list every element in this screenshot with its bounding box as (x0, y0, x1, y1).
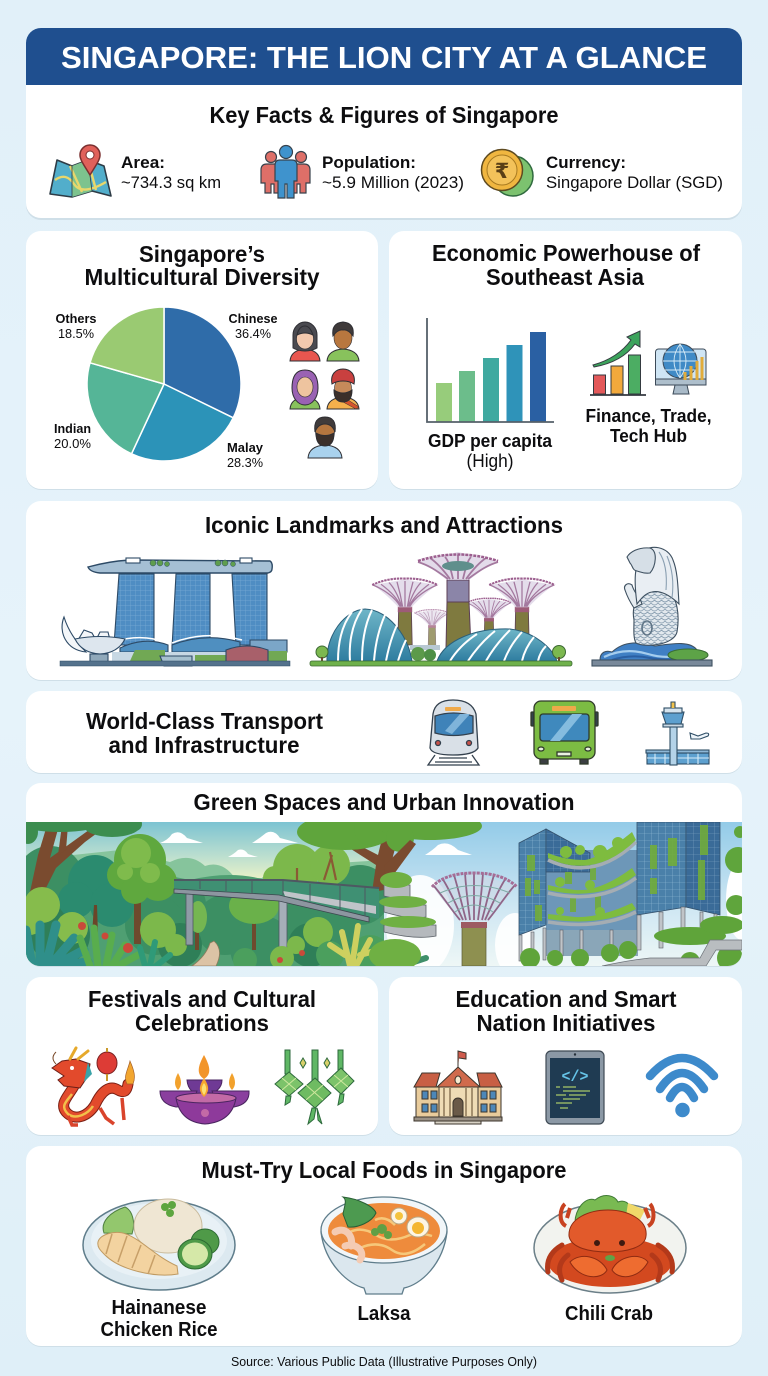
text: area: Area: (121, 153, 165, 172)
label: chicken rice: Hainanese (112, 1297, 206, 1319)
text: population (322, 153, 464, 192)
heading: local foods: Must-Try Local Foods in Singapore (202, 1157, 566, 1183)
heading: education: Education and Smart (456, 986, 677, 1012)
icon: coins (482, 150, 533, 196)
heading: transport (86, 708, 323, 758)
label: chicken rice (100, 1297, 218, 1341)
terraces (384, 885, 436, 937)
tall tree left (30, 831, 95, 892)
heading: key facts: Key Facts & Figures of Singapore (210, 102, 558, 128)
panel: transport (26, 691, 742, 774)
canopy walkway (174, 879, 379, 948)
panel: education (389, 977, 742, 1136)
illustration: Marina Bay Sands (60, 558, 290, 666)
label: finance, trade, tech hub (586, 405, 712, 446)
text: currency: Singapore Dollar (SGD) (546, 173, 723, 192)
text: area: ~734.3 sq km (121, 173, 221, 192)
illustration: chicken rice (83, 1199, 235, 1290)
heading: transport: and Infrastructure (108, 732, 300, 758)
heading: green spaces: Green Spaces and Urban Innovation (194, 789, 574, 815)
panel: economic powerhouse (389, 231, 742, 490)
icon: monitor and globe (656, 344, 706, 394)
green building (519, 822, 720, 935)
panel: key facts (26, 28, 742, 220)
heading: festivals: Festivals and Cultural (88, 986, 316, 1012)
illustration: forest and vertical gardens (26, 822, 742, 966)
distant hills (26, 850, 384, 966)
icon: wifi (650, 1058, 714, 1113)
text: area (121, 153, 221, 192)
icon: train (428, 700, 479, 765)
source note: Source: Various Public Data (Illustrative Purposes Only) (231, 1355, 537, 1369)
mid foreground tree (140, 912, 187, 956)
panel: multicultural diversity (26, 231, 378, 490)
icon: tablet with code: </> (562, 1068, 588, 1086)
icon: bus (531, 701, 598, 764)
icon: growth bars with arrow (590, 331, 646, 395)
panel: local foods (26, 1146, 742, 1347)
heading: multicultural diversity: Multicultural Diversity (84, 264, 320, 290)
label: GDP per capita (428, 430, 553, 471)
pie labels: 20.0% (54, 437, 91, 451)
background trees (26, 846, 388, 966)
heading: transport: World-Class Transport (86, 708, 323, 734)
heading: economic powerhouse: Southeast Asia (486, 264, 644, 290)
ground plants (520, 916, 742, 966)
icon: coins: ₹ (495, 159, 509, 183)
label: GDP per capita: GDP per capita (428, 430, 553, 451)
bar chart: GDP per capita (427, 318, 554, 422)
heading: economic powerhouse: Economic Powerhouse of (432, 240, 700, 266)
label: GDP per capita: (High) (466, 450, 514, 471)
pie labels (54, 312, 278, 470)
supertree (432, 872, 517, 966)
heading: multicultural diversity (84, 241, 320, 290)
light tree (134, 898, 141, 944)
heading: iconic landmarks: Iconic Landmarks and Attractions (205, 512, 563, 538)
icon: tablet with code (546, 1051, 604, 1124)
panel: festivals (26, 977, 378, 1136)
text: currency: Currency: (546, 153, 626, 172)
illustration: laksa (321, 1197, 447, 1294)
label: finance, trade, tech hub: Tech Hub (610, 425, 687, 446)
heading: economic powerhouse (432, 240, 700, 290)
heading: multicultural diversity: Singapore’s (139, 241, 265, 267)
icon: diverse people (290, 322, 359, 458)
foreground plants (270, 917, 333, 970)
teal tree (58, 855, 134, 927)
icon: airport tower (646, 702, 709, 765)
text: population: Population: (322, 153, 416, 172)
icon: diyas (160, 1055, 249, 1124)
label: laksa: Laksa (358, 1303, 411, 1325)
pie labels: Others (56, 312, 97, 326)
label: finance, trade, tech hub: Finance, Trade, (586, 405, 712, 426)
text: population: ~5.9 Million (2023) (322, 173, 464, 192)
left bush (26, 887, 88, 944)
label: chili crab: Chili Crab (565, 1303, 653, 1325)
heading: education: Nation Initiatives (476, 1010, 656, 1036)
columns (546, 930, 638, 956)
pie labels: Indian (54, 422, 91, 436)
heading: festivals: Celebrations (135, 1010, 269, 1036)
illustration: chili crab (534, 1196, 686, 1293)
pie labels: Malay (227, 441, 263, 455)
panel: green spaces (16, 783, 758, 980)
heading: festivals (88, 986, 316, 1036)
icon: map with pin (50, 145, 111, 197)
heading: education (456, 986, 677, 1036)
illustration: Gardens by the Bay (310, 552, 572, 666)
title banner: SINGAPORE: THE LION CITY AT A GLANCE (61, 40, 707, 75)
right trees (263, 844, 350, 884)
mid trees (252, 924, 256, 950)
pie chart (87, 307, 241, 461)
title banner (26, 28, 742, 85)
pie labels: 28.3% (227, 456, 263, 470)
icon: school building (414, 1051, 502, 1124)
clouds (160, 832, 758, 977)
text: currency (546, 153, 723, 192)
icon: dragon and lantern (52, 1048, 134, 1125)
illustration: Merlion (592, 547, 712, 666)
label: chicken rice: Chicken Rice (100, 1319, 218, 1341)
pie labels: Chinese (228, 312, 278, 326)
panel: iconic landmarks (26, 501, 742, 681)
pie labels: 36.4% (235, 327, 271, 341)
icon: people (261, 146, 310, 198)
icon: ketupat (275, 1050, 354, 1124)
pie labels: 18.5% (58, 327, 94, 341)
footpath (192, 941, 220, 966)
